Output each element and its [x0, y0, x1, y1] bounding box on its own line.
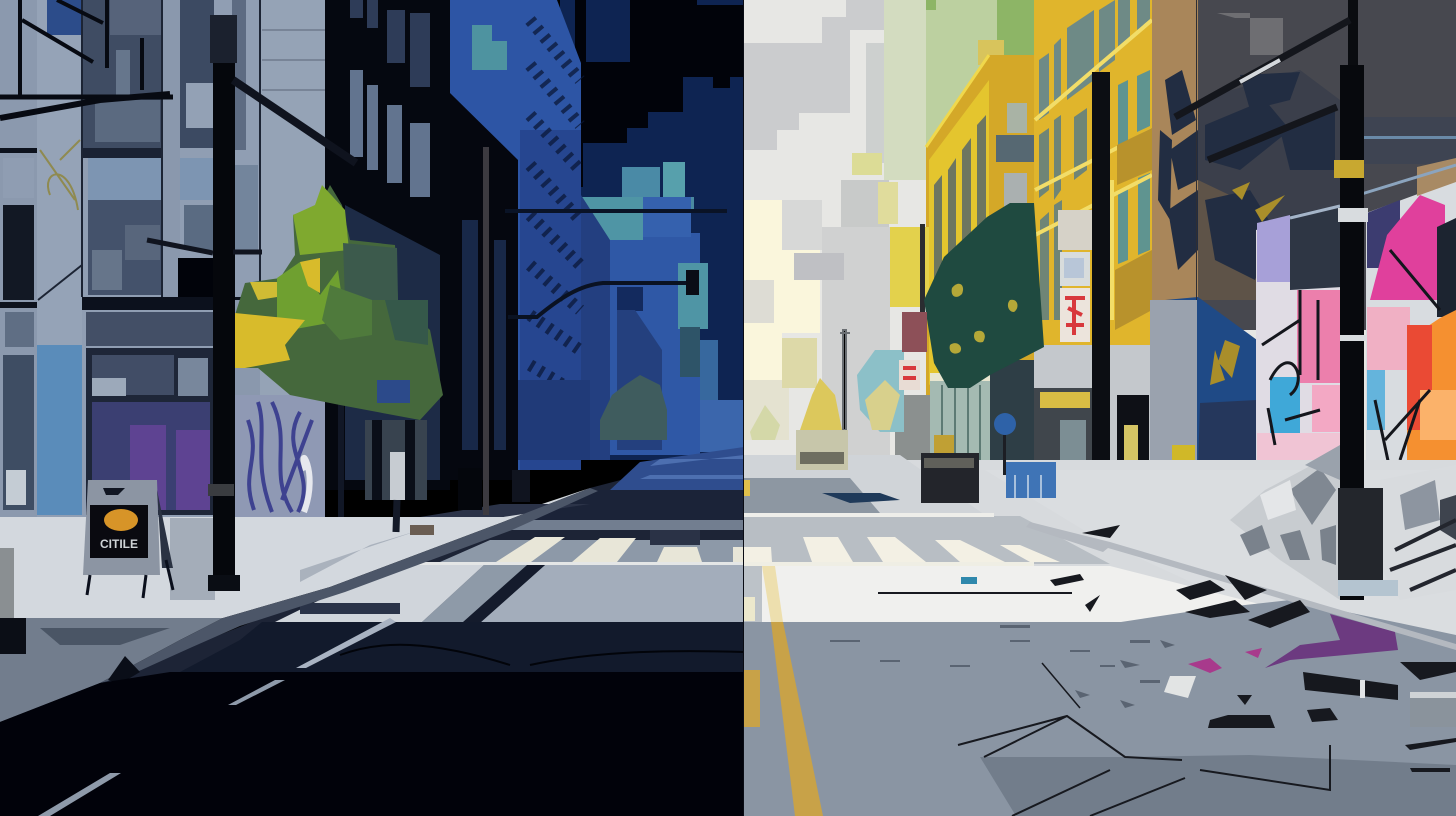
curb face: [100, 488, 598, 683]
shaded foreground road: [744, 600, 1456, 816]
far road: [610, 447, 744, 490]
tree: [235, 185, 443, 545]
crosswalk band: [440, 540, 744, 562]
pedestrian: [390, 452, 434, 535]
sidewalk: [0, 488, 590, 618]
crosswalk band: [744, 516, 1110, 564]
fire escape: [0, 0, 173, 118]
dark debris strokes: [878, 525, 1456, 772]
left edge pole: [0, 548, 26, 654]
hanging signs on pole: [1058, 210, 1092, 342]
sun glow: [744, 200, 820, 380]
traffic mast: [458, 147, 727, 515]
right street pole: [1175, 0, 1398, 600]
road debris: [325, 622, 361, 632]
far road: [744, 455, 985, 515]
street tree: [924, 203, 1044, 388]
centre pole: [1090, 72, 1112, 536]
sidewalk: [985, 470, 1456, 640]
tree light flecks: [950, 284, 1017, 354]
hazy distant buildings: [782, 0, 1034, 457]
panel: right day side: [744, 0, 1456, 816]
graffiti mural wall: [1256, 158, 1456, 480]
roadside signs and far trees: [750, 312, 927, 440]
curb: [1026, 522, 1456, 650]
road debris at left: [822, 493, 900, 503]
can: [1410, 692, 1456, 727]
teal can on road: [961, 577, 977, 584]
blue mid building: [450, 0, 610, 470]
night sky: [560, 0, 744, 460]
centre divider: [743, 0, 744, 816]
crack lines: [958, 716, 1330, 816]
crosswalk stripes: [744, 537, 1060, 562]
grey building facade: [0, 0, 325, 518]
canister: [1303, 672, 1398, 700]
scattered small debris: [830, 625, 1175, 708]
shadowed slab: [980, 755, 1456, 816]
blue bin and road sign: [994, 413, 1056, 498]
distant street tree: [600, 375, 667, 440]
sidewalk shadows: [170, 518, 215, 600]
navy sky patch: [586, 0, 744, 62]
yellow building: [890, 55, 1034, 400]
black foreground road: [0, 672, 744, 816]
shaded road: [180, 622, 744, 672]
rubble pile: [1230, 445, 1456, 600]
sky grey blocks: [744, 0, 884, 150]
panel: left night side: [0, 0, 744, 816]
lane markings: [38, 680, 285, 816]
purple debris: [1188, 614, 1398, 673]
distant bus: [796, 430, 848, 470]
day sky: [744, 0, 1366, 460]
corner building: [1034, 0, 1152, 502]
paper sheet: [1164, 676, 1196, 698]
sidewalk sign: [83, 480, 173, 598]
lit road patches: [481, 565, 744, 622]
yellow centre line: [744, 566, 823, 816]
road surface: [744, 460, 1456, 816]
sidewalk sign: CITILE: [100, 537, 138, 551]
stop line: [744, 562, 1034, 566]
distant teal buildings: [580, 162, 744, 455]
crosswalk stripes: [496, 537, 744, 562]
thin road crack: [1042, 663, 1080, 708]
construction machine: [921, 435, 979, 503]
road base: [7, 480, 743, 720]
stop line: [412, 562, 744, 565]
lit lane: [744, 566, 1330, 622]
left street pole: [147, 15, 356, 591]
dark building: [325, 0, 518, 500]
shadowed graffiti building: [1150, 0, 1456, 505]
storefronts: [895, 360, 1034, 470]
black sky blocks: [575, 0, 744, 187]
